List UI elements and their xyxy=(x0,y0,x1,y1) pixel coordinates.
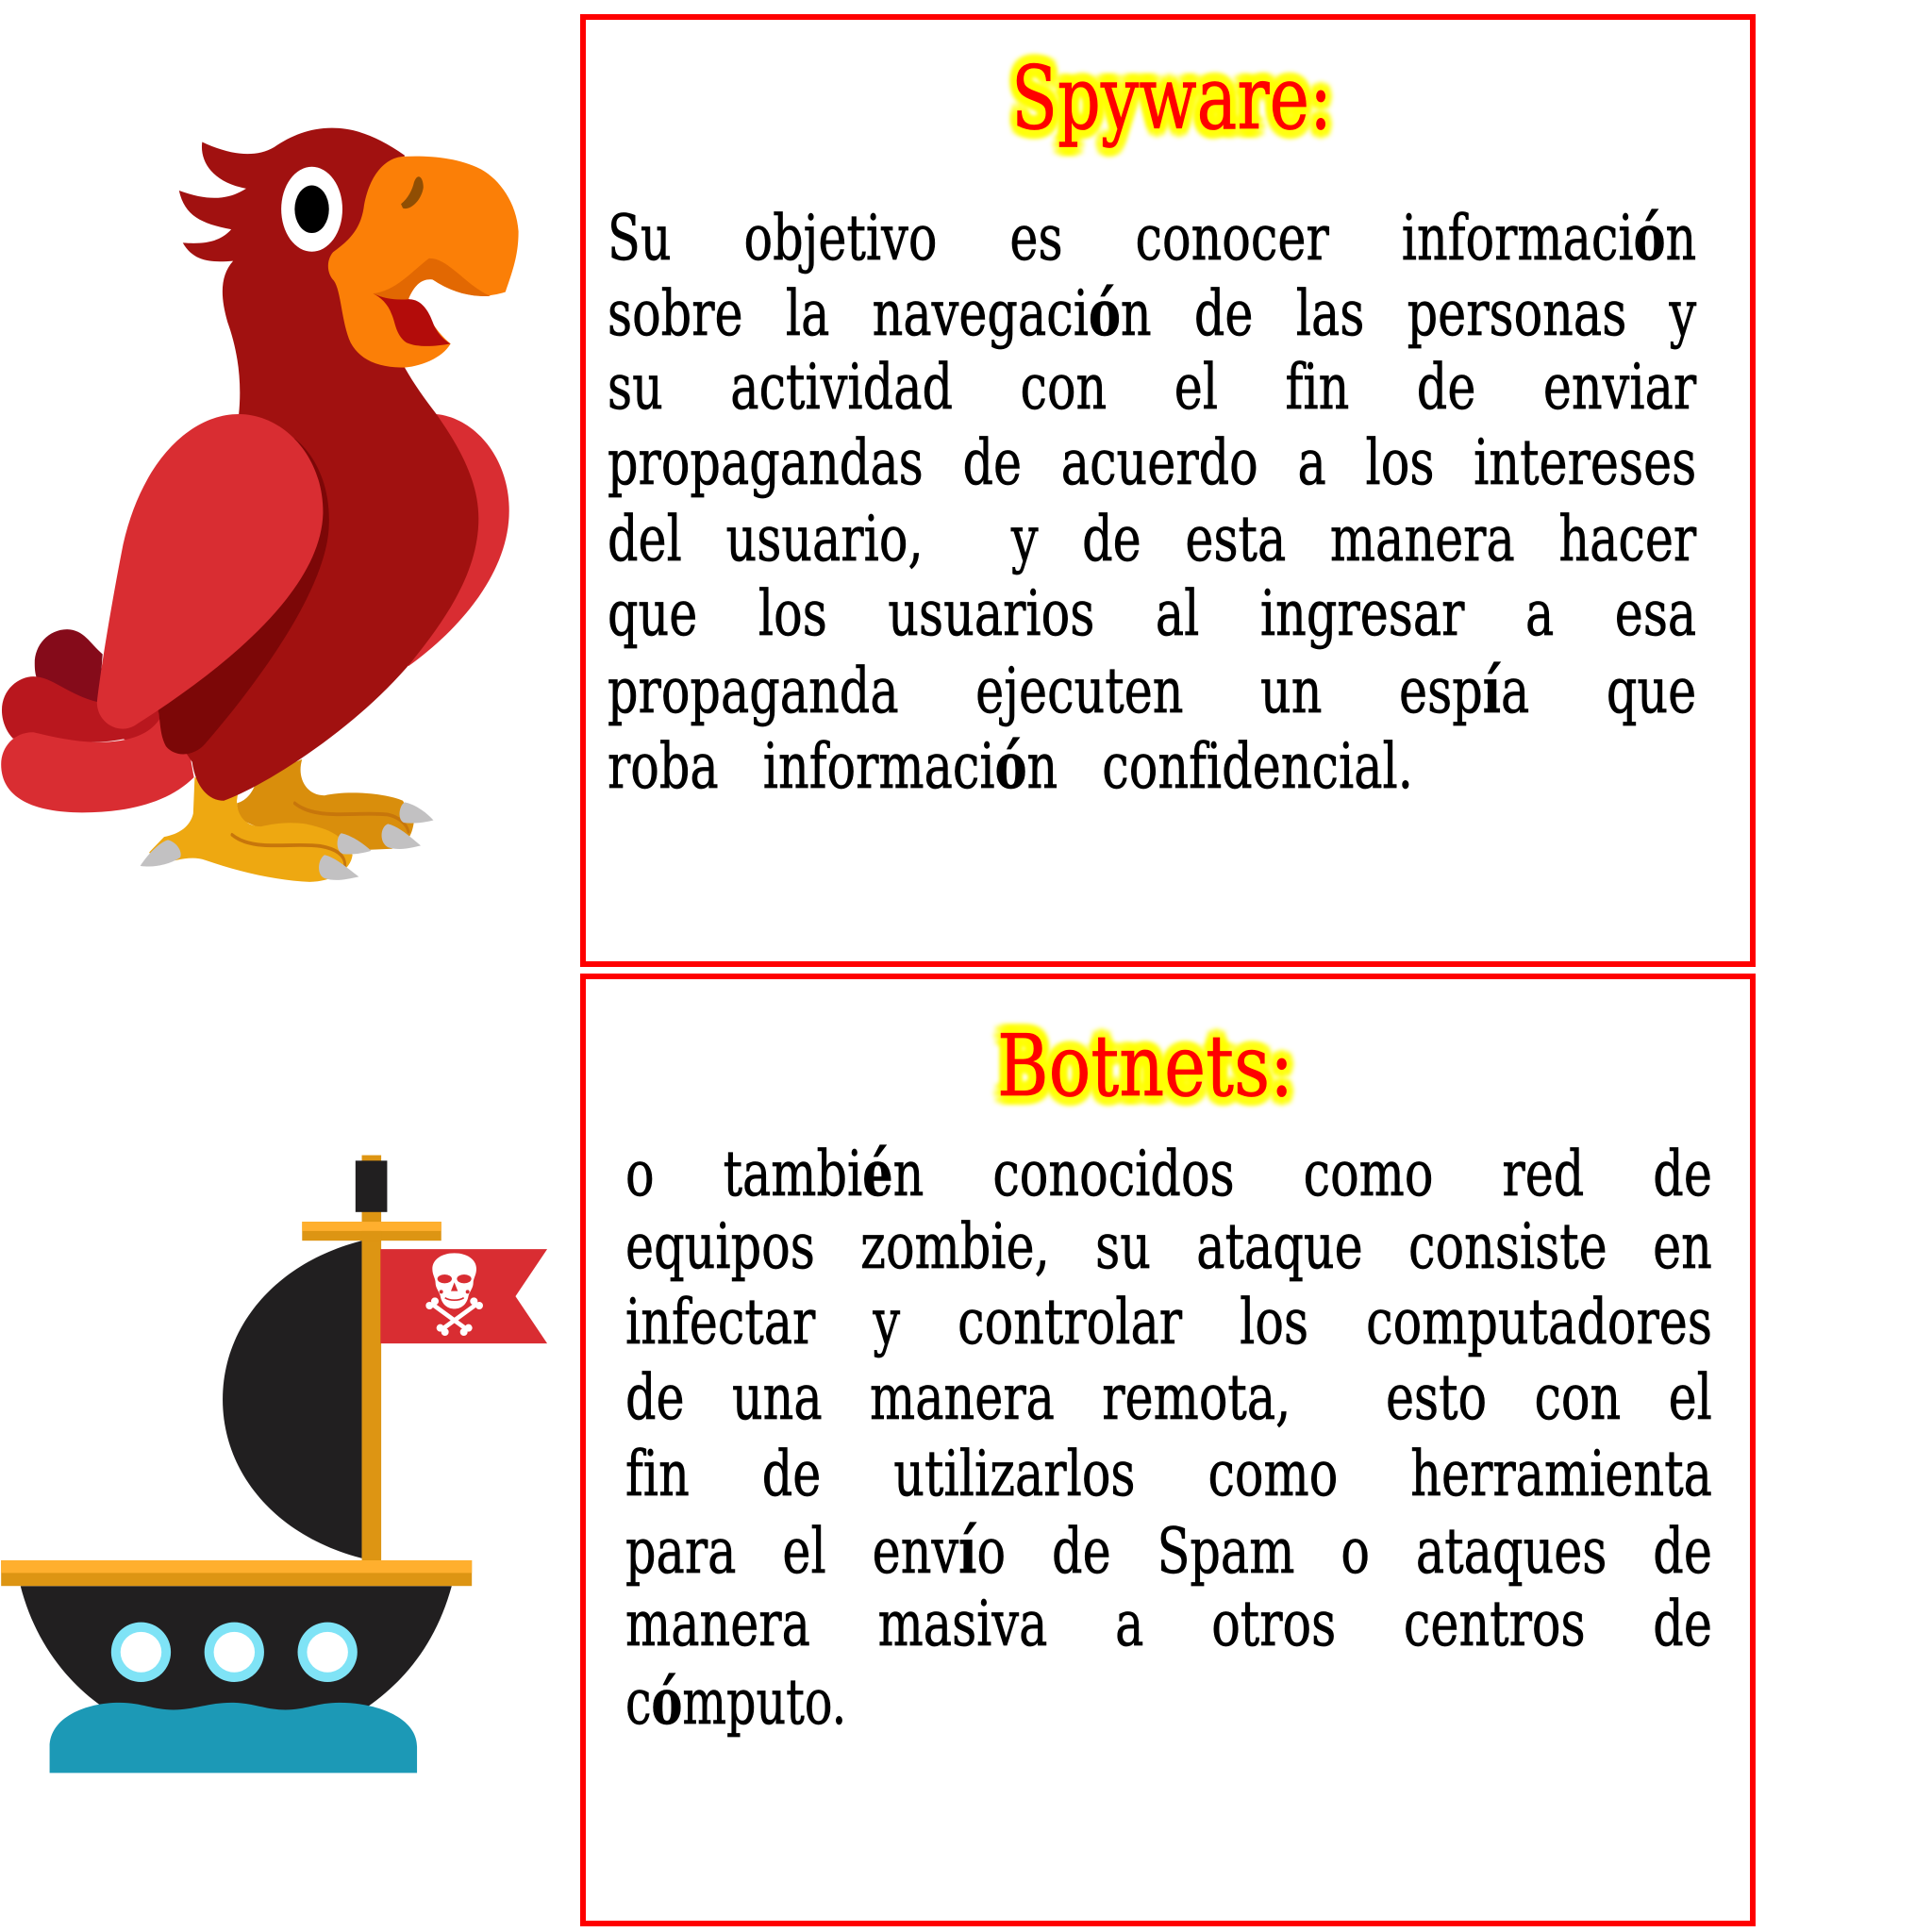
text block: Botnets description: infectar y controlar los computadores xyxy=(625,1286,1712,1358)
text block: Botnets description: equipos zombie, su ataque consiste en xyxy=(625,1210,1712,1283)
text block: Spyware description: que los usuarios al ingresar a esa xyxy=(608,577,1696,650)
text block: Spyware description: roba información confidencial. xyxy=(608,729,1413,803)
text block: Spyware description: propagandas de acuerdo a los intereses xyxy=(608,426,1696,499)
text block: Spyware description: del usuario, y de esta manera hacer xyxy=(608,503,1696,575)
text block: Botnets description: para el envío de Spam o ataques de xyxy=(625,1514,1712,1588)
heading: Botnets: Botnets: xyxy=(997,1017,1293,1116)
text block: Spyware description xyxy=(608,201,1696,803)
panel: Spyware xyxy=(580,14,1756,967)
text block: Botnets description: manera masiva a otros centros de xyxy=(625,1588,1712,1660)
text block: Botnets description: o también conocidos como red de xyxy=(625,1137,1712,1210)
text block: Botnets description: fin de utilizarlos como herramienta xyxy=(625,1438,1712,1510)
panel: Botnets xyxy=(580,974,1756,1926)
text block: Botnets description: cómputo. xyxy=(625,1665,846,1739)
text block: Spyware description: Su objetivo es conocer información xyxy=(608,201,1696,275)
illustration: pirate ship xyxy=(1,1155,547,1774)
text block: Spyware description: propaganda ejecuten un espía que xyxy=(608,654,1696,727)
illustration: red parrot xyxy=(1,128,519,882)
heading: Spyware: Spyware: xyxy=(1011,47,1332,149)
text block: Botnets description: de una manera remota, esto con el xyxy=(625,1361,1712,1434)
text block: Botnets description xyxy=(625,1137,1712,1739)
text block: Spyware description: su actividad con el fin de enviar xyxy=(608,351,1696,424)
text block: Spyware description: sobre la navegación de las personas y xyxy=(608,276,1696,350)
